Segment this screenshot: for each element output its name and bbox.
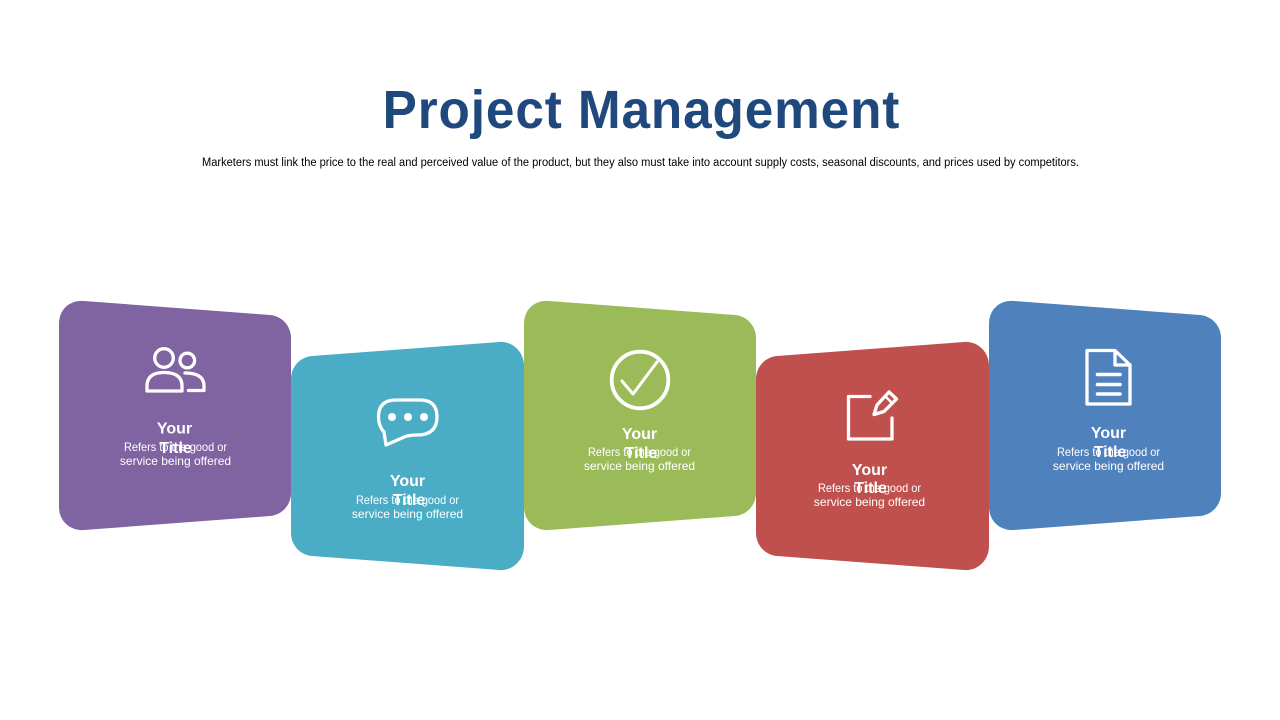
card text: teal <box>352 473 463 521</box>
card text: red: Title <box>854 480 887 497</box>
card shape: red <box>756 342 989 570</box>
panel: blue card <box>989 301 1221 530</box>
card text: red <box>814 462 925 509</box>
card text: blue <box>1053 425 1164 473</box>
panel: red card <box>756 342 989 570</box>
icon: people <box>147 349 204 391</box>
card text: teal: Title <box>393 492 425 509</box>
card text: red: Refers to the good or <box>818 481 921 495</box>
card text: purple: Title <box>159 440 192 457</box>
card text: red: service being offered <box>814 495 925 509</box>
card text: purple: service being offered <box>120 454 231 468</box>
card text: blue: Refers to the good or <box>1057 445 1160 459</box>
card text: purple: Refers to the good or <box>124 440 227 454</box>
icon: document <box>1087 350 1130 404</box>
card text: green: Title <box>625 445 657 462</box>
card text: red: Your <box>852 462 887 479</box>
card shape: teal <box>291 342 524 570</box>
card shape: green <box>524 301 756 530</box>
icon: speech bubble <box>378 400 437 445</box>
card text: teal: service being offered <box>352 507 463 521</box>
card text: blue: Your <box>1091 425 1126 442</box>
card text: purple <box>120 420 231 468</box>
icon: edit note <box>848 392 896 439</box>
title: Project Management <box>383 80 899 140</box>
card shape: blue <box>989 301 1221 530</box>
panel: green card <box>524 301 756 530</box>
card text: green: service being offered <box>584 459 695 473</box>
card shape: purple <box>59 301 291 530</box>
card text: teal: Refers to the good or <box>356 493 459 507</box>
card text: blue: service being offered <box>1053 459 1164 473</box>
card text: teal: Your <box>390 473 425 490</box>
card text: green <box>584 426 695 473</box>
card text: blue: Title <box>1094 444 1126 461</box>
card text: green: Your <box>622 426 657 443</box>
icon: check circle <box>612 352 668 408</box>
subtitle text: Marketers must link the price to the real and perceived value of the product, but they also must take into account supply costs, seasonal discounts, and prices used by competitors. <box>202 157 1079 169</box>
card text: green: Refers to the good or <box>588 445 691 459</box>
panel: purple card <box>59 301 291 530</box>
card text: purple: Your <box>157 420 192 438</box>
panel: teal card <box>291 342 524 570</box>
